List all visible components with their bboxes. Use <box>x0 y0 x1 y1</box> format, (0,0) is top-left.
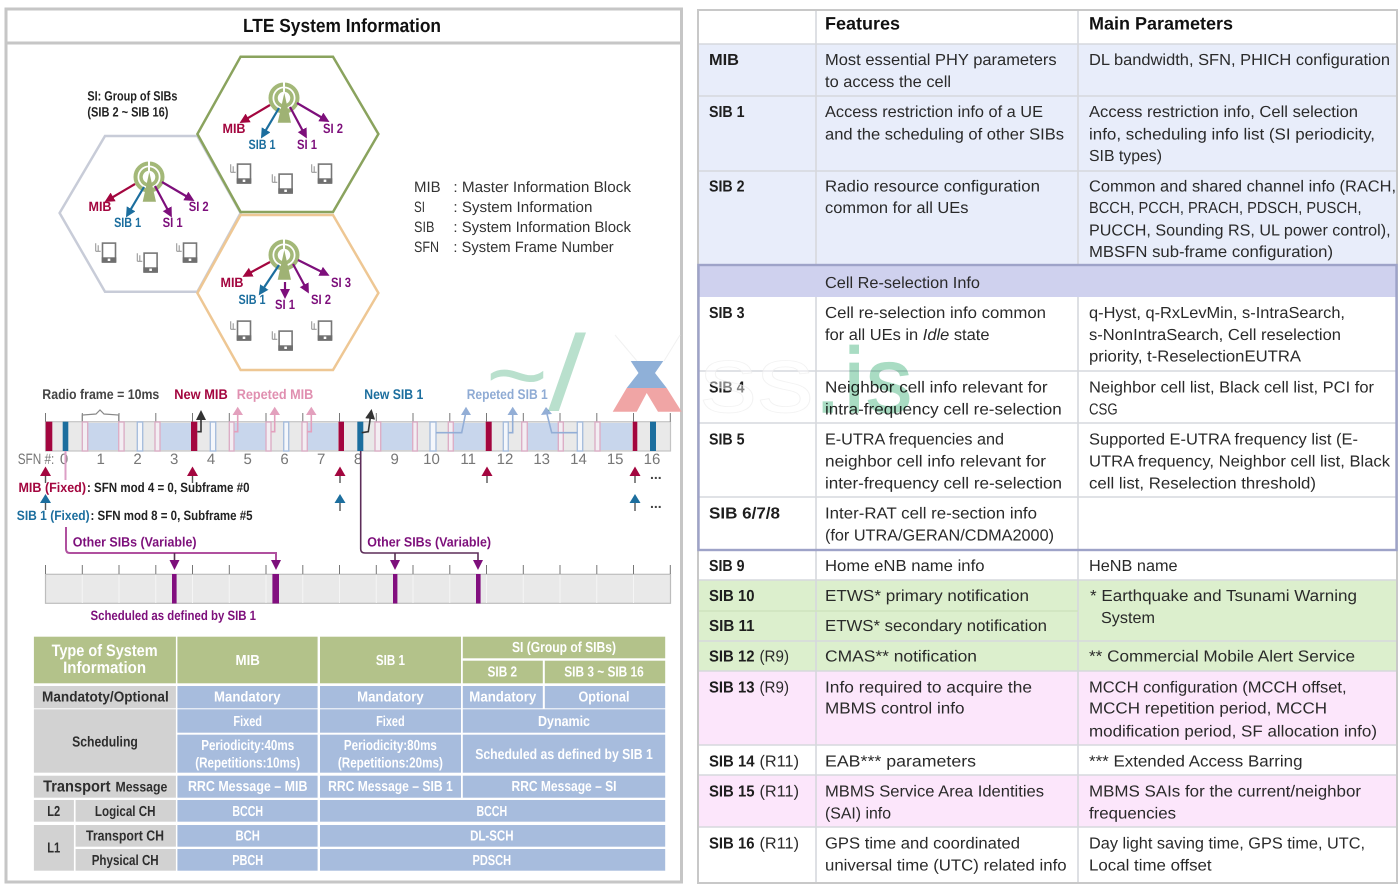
column headers <box>698 10 1397 44</box>
row: L1 transport and physical channels: DL-SCH <box>470 828 514 844</box>
cell: left gray hexagon: MIB <box>88 199 112 214</box>
ellipsis marks: ... <box>650 495 662 511</box>
row: SIB 1: Access restriction info of a UE <box>825 104 1043 121</box>
timeline arrows and labels: new and repeated blocks: Repeted MIB <box>237 386 313 402</box>
axis: SFN numbers: 10 <box>423 451 440 468</box>
watermark: / <box>548 313 586 433</box>
cell: bottom orange hexagon: SI 3 <box>331 275 351 290</box>
row: SIB 2: common for all UEs <box>825 200 968 217</box>
row: mandatory or optional: Mandatory <box>214 690 281 706</box>
row: SIB 2: Radio resource configuration <box>825 178 1040 196</box>
row: L1 transport and physical channels <box>34 825 665 871</box>
row: SIB 12: (R9) <box>760 648 789 666</box>
label: scheduled as defined by SIB 1: Scheduled as defined by SIB 1 <box>90 608 256 623</box>
row: MIB <box>698 44 1397 96</box>
row: SIB 3: for all UEs in Idle state <box>825 327 990 344</box>
row: transport message: Message <box>116 778 167 794</box>
axis: SFN numbers: 0 <box>60 451 68 468</box>
text: MIB fixed rule <box>18 480 250 495</box>
row: SIB 5: cell list, Reselection threshold) <box>1089 476 1316 492</box>
ellipsis marks: ... <box>650 466 662 482</box>
row: SIB 16: (R11) <box>760 836 799 852</box>
watermark: ss <box>700 326 814 433</box>
row: SIB 4: SIB 4 <box>709 380 745 396</box>
row: SIB 5 <box>698 423 1397 497</box>
row: MIB: to access the cell <box>825 74 951 91</box>
axis: SFN numbers: 1 <box>97 451 105 468</box>
row: SIB 16: universal time (UTC) related info <box>825 858 1067 874</box>
section header: cell re-selection info: Cell Re-selection Info <box>825 275 980 292</box>
row: SIB 9: Home eNB name info <box>825 558 985 575</box>
row: SIB 4: CSG <box>1089 402 1118 418</box>
rows: SIB 10 and SIB 11: * Earthquake and Tsunami Warning <box>1090 588 1357 605</box>
cell: top green hexagon: MIB <box>222 121 246 136</box>
table header: Type of System <box>52 642 158 660</box>
row: SIB 9 <box>698 550 1397 580</box>
axis: SFN numbers: 7 <box>317 451 325 468</box>
row: scheduling: Scheduled as defined by SIB 1 <box>475 747 653 763</box>
label: other SIBs variable, first: Other SIBs (Variable) <box>73 534 196 550</box>
row: L1 transport and physical channels: Transport CH <box>86 828 164 844</box>
rows: SIB 10 and SIB 11: SIB 10 <box>709 588 755 605</box>
cell: left gray hexagon: SI 2 <box>189 199 209 214</box>
row: L1 transport and physical channels: Physical CH <box>92 853 159 869</box>
title: LTE System Information <box>243 16 441 37</box>
row: SIB 14: *** Extended Access Barring <box>1089 754 1302 770</box>
row: L2 logical channel: Logical CH <box>95 804 156 820</box>
axis: SFN numbers: 16 <box>644 451 660 468</box>
row: SIB 5: Supported E-UTRA frequency list (E- <box>1089 432 1358 448</box>
row: SIB 13 <box>698 671 1397 745</box>
watermark: .is <box>815 330 912 432</box>
row: SIB 1: SIB 1 <box>709 104 745 121</box>
cell: top green hexagon: SIB 1 <box>248 137 276 152</box>
legend: abbreviations: SI <box>414 199 425 216</box>
row: scheduling: Periodicity:40ms <box>201 738 294 754</box>
row: SIB 3: q-Hyst, q-RxLevMin, s-IntraSearch, <box>1089 305 1345 322</box>
row: SIB 4: Neighbor cell info relevant for <box>825 380 1048 396</box>
row: scheduling <box>34 709 665 773</box>
row: SIB 12: ** Commercial Mobile Alert Service <box>1089 648 1355 666</box>
row: SIB 14 <box>698 745 1397 775</box>
legend: abbreviations: SFN <box>414 239 439 256</box>
axis: SFN numbers: 9 <box>391 451 399 468</box>
row: SIB 9: HeNB name <box>1089 558 1178 575</box>
axis: SFN numbers: 5 <box>244 451 252 468</box>
table header: MIB <box>236 653 260 669</box>
row: transport message: RRC Message – SI <box>512 779 616 795</box>
row: transport message: RRC Message – MIB <box>188 779 307 795</box>
annotation: SI group of SIBs: (SIB 2 ~ SIB 16) <box>87 104 168 120</box>
row: MIB: Most essential PHY parameters <box>825 52 1057 69</box>
legend: abbreviations <box>414 179 632 256</box>
row: SIB 1: info, scheduling info list (SI periodicity, <box>1089 126 1375 144</box>
row: scheduling: (Repetitions:20ms) <box>338 756 443 772</box>
watermark: ~ <box>486 319 548 431</box>
row: SIB 16: Local time offset <box>1089 858 1212 874</box>
cell: top green hexagon <box>197 57 378 212</box>
row: SIB 3: s-NonIntraSearch, Cell reselection <box>1089 327 1341 344</box>
row: SIB 15: (SAI) info <box>825 806 891 822</box>
row: SIB 13: Info required to acquire the <box>825 680 1032 696</box>
watermark <box>486 313 912 433</box>
row: scheduling: Dynamic <box>538 714 590 730</box>
rows: SIB 10 and SIB 11 <box>698 580 1397 641</box>
axis: SFN numbers: 6 <box>280 451 289 468</box>
axis: SFN numbers: SFN #: <box>18 451 54 468</box>
row: scheduling: Fixed <box>233 714 262 730</box>
row: mandatory or optional: Mandatory <box>357 690 424 706</box>
row: SIB 3: Cell re-selection info common <box>825 305 1046 322</box>
row: SIB 4 <box>698 371 1397 423</box>
row: SIB 2 <box>698 171 1397 265</box>
axis: SFN numbers: 11 <box>460 451 476 468</box>
table header <box>34 637 665 683</box>
row: SIB 6/7/8: (for UTRA/GERAN/CDMA2000) <box>825 528 1054 544</box>
row: L2 logical channel: BCCH <box>232 804 263 820</box>
rows: SIB 10 and SIB 11: ETWS* secondary notification <box>825 618 1047 635</box>
connectors: other SIBs from SIB 1 <box>66 451 478 566</box>
cell: top green hexagon: SI 2 <box>323 121 343 136</box>
row: SIB 14: EAB*** parameters <box>825 754 976 770</box>
timeline arrows and labels: new and repeated blocks: Repeted SIB 1 <box>467 386 548 402</box>
axis: SFN numbers: 12 <box>497 451 513 468</box>
row: SIB 12: CMAS** notification <box>825 648 977 666</box>
row: mandatory or optional: Mandatoty/Optional <box>42 690 169 706</box>
row: SIB 4: intra-frequency cell re-selection <box>825 402 1062 418</box>
row: transport message <box>34 776 665 798</box>
row: SIB 5: inter-frequency cell re-selection <box>825 476 1062 492</box>
row: SIB 13: MCCH repetition period, MCCH <box>1089 700 1327 718</box>
row: mandatory or optional <box>34 686 665 708</box>
row: SIB 2: BCCH, PCCH, PRACH, PDSCH, PUSCH, <box>1089 200 1362 217</box>
row: SIB 15: (R11) <box>760 784 799 800</box>
axis: SFN numbers: 8 <box>354 451 362 468</box>
legend: abbreviations: : System Information Block <box>453 219 631 236</box>
cell: bottom orange hexagon: SI 2 <box>311 292 331 307</box>
row: SIB 3 <box>698 297 1397 371</box>
row: SIB 13: (R9) <box>760 680 789 696</box>
row: SIB 6/7/8 <box>698 497 1397 550</box>
column headers: Main Parameters <box>1089 14 1233 34</box>
cell: left gray hexagon: SIB 1 <box>114 215 141 230</box>
row: SIB 12: SIB 12 <box>709 648 755 666</box>
row: L1 transport and physical channels: L1 <box>47 840 60 856</box>
row: SIB 4: Neighbor cell list, Black cell list, PCI for <box>1089 380 1375 396</box>
table header: SIB 3 ~ SIB 16 <box>564 664 644 680</box>
label: other SIBs variable, second: Other SIBs (Variable) <box>367 534 491 550</box>
text: MIB fixed rule: MIB (Fixed) <box>18 480 86 495</box>
arrows: SIB 1 fixed period <box>40 494 640 511</box>
row: SIB 5: neighbor cell info relevant for <box>825 454 1047 470</box>
axis: SFN numbers <box>18 451 660 468</box>
row: transport message: Transport <box>43 778 111 796</box>
legend: abbreviations: MIB <box>414 179 441 196</box>
row: SIB 5: SIB 5 <box>709 432 745 448</box>
row: MIB: MIB <box>709 52 739 69</box>
row: L1 transport and physical channels: PBCH <box>232 853 263 869</box>
row: SIB 1 <box>698 96 1397 171</box>
row: L1 transport and physical channels: PDSCH <box>472 853 511 869</box>
row: SIB 2: MBSFN sub-frame configuration) <box>1089 244 1333 261</box>
rows: SIB 10 and SIB 11: SIB 11 <box>709 618 755 635</box>
row: L2 logical channel: BCCH <box>476 804 507 820</box>
row: SIB 15: SIB 15 <box>709 784 755 800</box>
row: scheduling: Periodicity:80ms <box>344 738 437 754</box>
text: SIB 1 fixed rule: : SFN mod 8 = 0, Subframe #5 <box>90 508 253 523</box>
row: SIB 12 <box>698 641 1397 671</box>
row: transport message: RRC Message – SIB 1 <box>328 779 453 795</box>
column headers: Features <box>825 14 900 34</box>
cell: bottom orange hexagon: SI 1 <box>275 297 295 312</box>
row: SIB 16: GPS time and coordinated <box>825 836 1020 852</box>
rows: SIB 10 and SIB 11: System <box>1101 610 1155 627</box>
row: SIB 15: MBMS Service Area Identities <box>825 784 1044 800</box>
axis: SFN numbers: 4 <box>207 451 215 468</box>
legend: abbreviations: : Master Information Block <box>453 179 632 196</box>
row: mandatory or optional: Mandatory <box>469 690 536 706</box>
arrows: MIB fixed period <box>40 466 640 483</box>
row: SIB 16: Day light saving time, GPS time, UTC, <box>1089 836 1365 852</box>
table: features and main parameters <box>698 10 1397 883</box>
row: SIB 3: SIB 3 <box>709 305 745 322</box>
row: SIB 1: SIB types) <box>1089 148 1162 165</box>
row: SIB 13: SIB 13 <box>709 680 755 696</box>
row: mandatory or optional: Optional <box>578 690 630 706</box>
table header: SI (Group of SIBs) <box>512 640 616 656</box>
text: SIB 1 fixed rule <box>17 508 253 523</box>
section header: cell re-selection info <box>698 265 1397 297</box>
row: SIB 15 <box>698 775 1397 827</box>
row: scheduling: (Repetitions:10ms) <box>195 756 300 772</box>
annotation: SI group of SIBs <box>87 88 177 120</box>
row: SIB 3: priority, t-ReselectionEUTRA <box>1089 348 1301 366</box>
cell: top green hexagon: SI 1 <box>297 137 317 152</box>
row: SIB 2: Common and shared channel info (RACH, <box>1089 178 1396 196</box>
table: type of system information <box>34 637 665 871</box>
ellipsis marks <box>650 466 662 511</box>
row: SIB 14: (R11) <box>760 754 799 770</box>
row: SIB 2: SIB 2 <box>709 178 745 196</box>
axis: SFN numbers: 15 <box>607 451 624 468</box>
axis: SFN numbers: 2 <box>133 451 142 468</box>
table header: Information <box>63 659 146 677</box>
axis: SFN numbers: 3 <box>170 451 178 468</box>
row: scheduling: Fixed <box>376 714 405 730</box>
cell: bottom orange hexagon: SIB 1 <box>238 292 266 307</box>
row: SIB 14: SIB 14 <box>709 754 755 770</box>
row: SIB 13: modification period, SF allocation info) <box>1089 724 1377 740</box>
brace: radio frame <box>82 410 119 421</box>
row: SIB 5: E-UTRA frequencies and <box>825 432 1004 448</box>
row: MIB: DL bandwidth, SFN, PHICH configuration <box>1089 52 1390 69</box>
row: L1 transport and physical channels: BCH <box>236 828 260 844</box>
annotation: SI group of SIBs: SI: Group of SIBs <box>87 88 177 104</box>
row: SIB 2: PUCCH, Sounding RS, UL power control), <box>1089 222 1391 240</box>
table header: SIB 2 <box>488 664 517 680</box>
row: SIB 6/7/8: SIB 6/7/8 <box>709 506 780 522</box>
row: scheduling: Scheduling <box>72 734 138 750</box>
cell: left gray hexagon <box>60 136 241 292</box>
label: radio frame duration: Radio frame = 10ms <box>42 386 159 402</box>
axis: SFN numbers: 13 <box>533 451 550 468</box>
row: L2 logical channel <box>34 800 665 822</box>
legend: abbreviations: SIB <box>414 219 434 236</box>
row: SIB 1: and the scheduling of other SIBs <box>825 126 1064 144</box>
row: SIB 6/7/8: Inter-RAT cell re-section info <box>825 506 1037 522</box>
cell: bottom orange hexagon: MIB <box>220 275 244 290</box>
text: SIB 1 fixed rule: SIB 1 (Fixed) <box>17 508 90 523</box>
row: SIB 13: MBMS control info <box>825 700 965 718</box>
timeline arrows and labels: new and repeated blocks: New SIB 1 <box>364 386 423 402</box>
timeline arrows and labels: new and repeated blocks <box>174 386 577 433</box>
timeline arrows and labels: new and repeated blocks: New MIB <box>174 386 228 402</box>
timeline: radio frames with MIB and SIB 1 <box>46 410 670 451</box>
row: L2 logical channel: L2 <box>47 804 60 820</box>
legend: abbreviations: : System Information <box>453 199 592 216</box>
row: SIB 13: MCCH configuration (MCCH offset, <box>1089 680 1347 696</box>
axis: SFN numbers: 14 <box>570 451 587 468</box>
row: SIB 16 <box>698 827 1397 883</box>
row: SIB 1: Access restriction info, Cell selection <box>1089 104 1358 121</box>
timeline: scheduled SIB window <box>46 565 670 604</box>
row: SIB 15: MBMS SAIs for the current/neighbor <box>1089 784 1362 800</box>
cell: left gray hexagon: SI 1 <box>163 215 183 230</box>
row: SIB 9: SIB 9 <box>709 558 745 575</box>
table header: SIB 1 <box>376 653 405 669</box>
row: SIB 5: UTRA frequency, Neighbor cell list, Black <box>1089 454 1391 470</box>
text: MIB fixed rule: : SFN mod 4 = 0, Subframe #0 <box>87 480 250 495</box>
row: SIB 15: frequencies <box>1089 806 1176 822</box>
cell: bottom orange hexagon <box>197 215 378 370</box>
row: SIB 16: SIB 16 <box>709 836 755 852</box>
rows: SIB 10 and SIB 11: ETWS* primary notification <box>825 588 1029 605</box>
legend: abbreviations: : System Frame Number <box>453 239 614 256</box>
